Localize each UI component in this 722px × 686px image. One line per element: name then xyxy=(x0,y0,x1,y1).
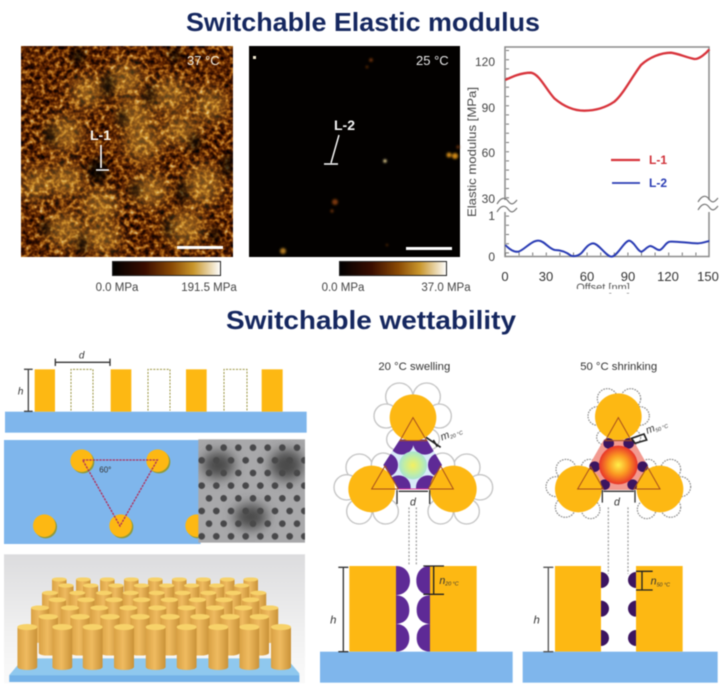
substrate xyxy=(523,652,718,683)
dimension m: m xyxy=(644,422,657,437)
y axis title: Elastic modulus [MPa] xyxy=(465,87,479,217)
y axis tick labels: 0 xyxy=(488,250,495,264)
shrunken brush petals xyxy=(546,389,691,519)
purple collapsed brush lobes xyxy=(382,438,442,490)
temperature label 25 C: 25 °C xyxy=(416,53,449,68)
substrate xyxy=(320,652,513,683)
dimension h xyxy=(534,567,553,652)
pillars xyxy=(555,393,683,512)
row 3 xyxy=(42,591,266,624)
dashed guide lines xyxy=(608,507,628,574)
label L-2 with arrow: L-2 xyxy=(334,117,355,133)
x axis tick labels xyxy=(501,269,719,284)
colour bar 1: 191.5 MPa xyxy=(181,282,237,294)
y axis tick labels: 60 xyxy=(482,146,495,160)
central pore hexagon xyxy=(383,439,442,489)
colour bar 2 xyxy=(322,262,471,294)
legend xyxy=(611,153,667,190)
row 6 xyxy=(39,614,269,656)
triangles xyxy=(372,418,453,489)
triangles xyxy=(578,418,660,489)
dimension d: d xyxy=(614,496,621,508)
panel: 20 C swelling schematic xyxy=(320,361,513,683)
bright spots xyxy=(253,56,460,254)
label L-1 with marker: L-1 xyxy=(90,127,111,143)
side view pillars xyxy=(349,566,477,652)
pore centre xyxy=(599,446,638,484)
central pore hexagon xyxy=(589,439,647,490)
heading: 20 °C swelling xyxy=(378,361,450,373)
pillar circles xyxy=(33,449,209,538)
dimension h xyxy=(330,567,348,652)
x axis tick labels: 90 xyxy=(621,269,635,284)
triangle lattice xyxy=(83,460,157,526)
top view xyxy=(334,383,493,524)
panel: AFM modulus map at 37 C xyxy=(21,46,233,257)
colour bar 1 xyxy=(96,262,237,294)
row 5 xyxy=(31,605,278,643)
title: Switchable Elastic modulus: Switchable Elastic modulus xyxy=(186,7,540,37)
dimension m xyxy=(426,424,464,447)
dimension h: h xyxy=(18,386,24,397)
swollen brush petals xyxy=(334,383,493,524)
dimension d xyxy=(397,490,430,508)
dimension n xyxy=(636,571,670,590)
line chart: elastic modulus vs offset xyxy=(465,47,719,294)
y axis tick labels: 1 xyxy=(488,209,495,223)
row 1 xyxy=(52,577,258,608)
x axis tick labels: 120 xyxy=(657,269,679,284)
temperature label 37 C: 37 °C xyxy=(187,53,220,68)
colour bar 1: 0.0 MPa xyxy=(96,282,139,294)
panel: pillar top view with triangle lattice and SEM xyxy=(4,439,305,544)
solid pillars xyxy=(35,369,283,412)
panel: pillar side view schematic xyxy=(5,351,307,433)
colour bar 2: 0.0 MPa xyxy=(322,282,365,294)
panel: 3D pillar array rendering xyxy=(4,554,305,683)
dimension h xyxy=(18,369,33,411)
pillars xyxy=(348,394,477,512)
pore centre xyxy=(399,451,427,479)
side view pillars xyxy=(555,566,683,652)
x axis tick labels: 60 xyxy=(580,269,594,284)
dimension d xyxy=(55,351,110,366)
row 2 xyxy=(58,583,249,616)
title: Switchable wettability: Switchable wettability xyxy=(226,305,517,335)
y axis tick labels xyxy=(475,55,495,264)
side view brush lobes xyxy=(396,566,430,652)
panel: 50 C shrinking schematic xyxy=(523,361,718,683)
y axis tick labels: 30 xyxy=(482,192,495,206)
dimension d xyxy=(602,490,635,508)
dark brush lobes xyxy=(589,438,648,490)
scale bar xyxy=(177,246,223,249)
dimension m: 20 °C xyxy=(448,430,464,441)
dimension m: m xyxy=(439,429,451,443)
dimension d: d xyxy=(410,496,417,508)
row 4 xyxy=(49,597,259,634)
top view xyxy=(546,389,691,519)
dimension n: 20 °C xyxy=(444,582,459,588)
x axis tick labels: 30 xyxy=(539,269,553,284)
scale bar xyxy=(406,247,452,250)
SEM image inset xyxy=(198,439,305,543)
dimension m: 50 °C xyxy=(655,423,670,434)
legend: L-1 xyxy=(649,153,667,167)
label L-2 with arrow xyxy=(324,117,355,164)
red curve L-1 xyxy=(505,49,709,111)
blue curve L-2 xyxy=(505,241,709,257)
x axis tick labels: 0 xyxy=(501,269,509,284)
x axis title: Offset [nm] xyxy=(576,282,630,294)
label L-1 with marker xyxy=(90,127,111,170)
axis break marks xyxy=(497,196,719,212)
colour bar 2: 37.0 MPa xyxy=(421,282,471,294)
side view brush lobes xyxy=(601,572,636,646)
dimension m xyxy=(632,417,670,443)
dimension n: 50 °C xyxy=(657,582,670,588)
substrate xyxy=(9,658,299,682)
dimension n xyxy=(423,566,459,594)
heading: 50 °C shrinking xyxy=(580,361,657,373)
dashed guide lines xyxy=(409,507,416,566)
panel: AFM modulus map at 25 C xyxy=(249,46,460,257)
dimension h: h xyxy=(534,614,540,626)
dimension n: n xyxy=(439,575,445,587)
dimension d: d xyxy=(79,351,85,362)
dimension h: h xyxy=(330,614,336,626)
legend: L-2 xyxy=(649,176,667,190)
y axis tick labels: 90 xyxy=(482,101,495,115)
angle label: 60° xyxy=(99,466,111,475)
row 7 xyxy=(17,624,291,670)
dashed pillars xyxy=(71,369,247,411)
y axis tick labels: 120 xyxy=(475,55,495,69)
x axis tick labels: 150 xyxy=(697,269,719,284)
dimension n: n xyxy=(651,576,657,588)
